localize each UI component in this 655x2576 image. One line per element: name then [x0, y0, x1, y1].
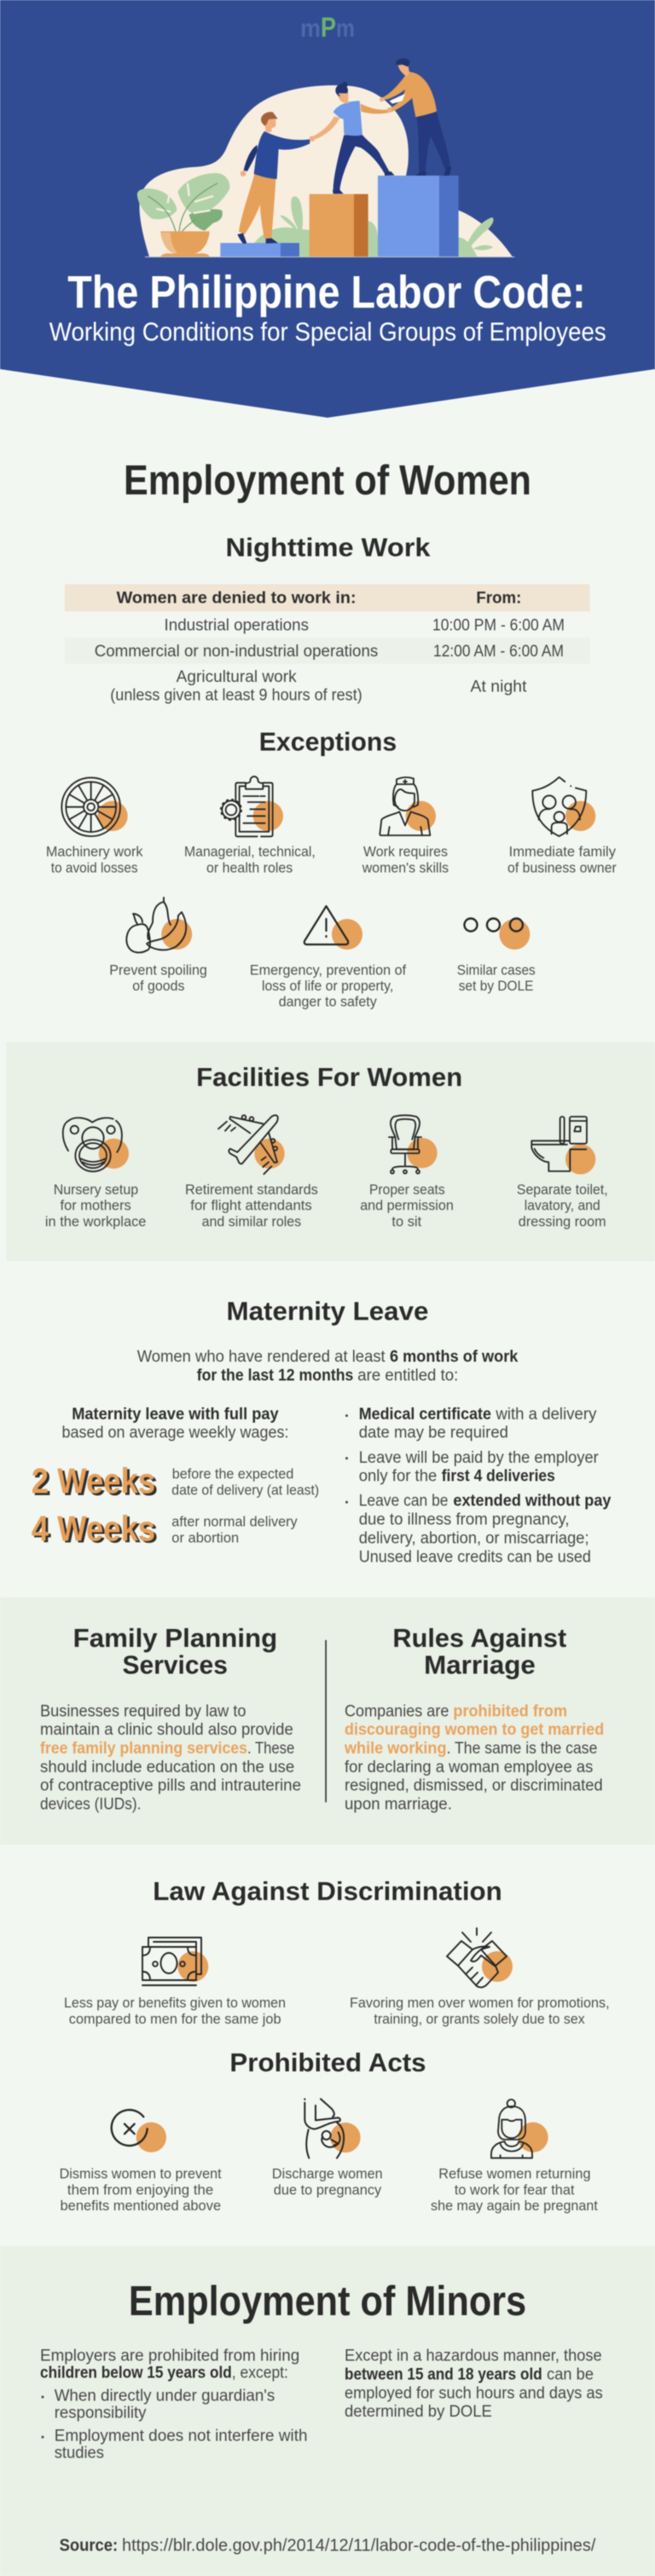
heading: prohibited acts: Prohibited Acts [229, 2048, 426, 2077]
text: maternity intro: are entitled to: [357, 1366, 458, 1384]
heading: exceptions: Exceptions [259, 727, 397, 757]
heading: employment of minors: Employment of Minors [129, 2279, 526, 2325]
caption: seats: and permission [360, 1198, 454, 1214]
list: maternity conditions: first 4 deliveries [442, 1468, 555, 1486]
caption: nursery: in the workplace [45, 1214, 146, 1229]
icon: three dots [464, 919, 530, 950]
text: maternity intro: 6 months of work [390, 1349, 519, 1366]
caption: managerial: Managerial, technical, [184, 845, 316, 860]
caption: toilet [517, 1182, 608, 1229]
caption: seats: to sit [391, 1214, 422, 1229]
caption: machinery [46, 845, 143, 875]
caption: nursery [45, 1182, 146, 1229]
logo: P [321, 12, 336, 43]
caption: machinery: Machinery work [46, 845, 143, 860]
caption: similar cases: set by DOLE [459, 979, 534, 994]
icon: pacifier [63, 1118, 129, 1171]
stat: 2 weeks [32, 1461, 319, 1503]
caption: emergency: Emergency, prevention of [250, 962, 407, 978]
text: rules against marriage: . The same is the case [447, 1740, 597, 1758]
caption: seats [360, 1182, 454, 1229]
text: family planning: of contraceptive pills and intrauterine [40, 1777, 301, 1795]
text: children below 15: Employment does not interfere with [55, 2427, 307, 2445]
icon: fruit [126, 898, 192, 952]
text: family planning: devices (IUDs). [40, 1796, 142, 1814]
caption: immediate family [507, 845, 617, 875]
caption: less pay: Less pay or benefits given to women [64, 1996, 286, 2011]
caption: dismiss: benefits mentioned above [60, 2198, 221, 2214]
stat: 4 weeks: 4 Weeks [32, 1508, 155, 1548]
caption: emergency: loss of life or property, [262, 979, 393, 994]
heading: rules against marriage: Rules Against [392, 1623, 566, 1653]
table: nighttime work hours: Agricultural work [177, 668, 297, 686]
caption: spoiling [109, 962, 207, 994]
caption: favoring men: Favoring men over women for promotions, [350, 1996, 610, 2011]
text: children below 15 [40, 2347, 307, 2462]
icon: woman with bun [491, 2099, 548, 2158]
text: rules against marriage: Companies are [345, 1702, 449, 1720]
text: rules against marriage [344, 1702, 604, 1814]
icon: money [142, 1938, 208, 1985]
text: family planning [40, 1702, 301, 1814]
list: maternity conditions: Leave can be [359, 1493, 449, 1510]
text: maternity intro: for the last 12 months [197, 1366, 353, 1384]
icon: clipboard and gear [221, 777, 283, 836]
caption: refuse: she may again be pregnant [431, 2198, 598, 2214]
caption: dismiss: them from enjoying the [67, 2182, 213, 2198]
caption: immediate family: Immediate family [509, 845, 617, 860]
stat: 4 weeks: after normal delivery [171, 1515, 298, 1530]
text: ages 15 to 18: Except in a hazardous manner, those [345, 2347, 602, 2365]
caption: retirement: and similar roles [202, 1214, 301, 1229]
heading: family planning: Services [123, 1649, 228, 1679]
list: maternity conditions: Unused leave credits can be used [359, 1548, 591, 1566]
list: maternity conditions: date may be required [359, 1424, 508, 1442]
panel: employment of minors [0, 2246, 655, 2576]
text: rules against marriage: discouraging women to get married [345, 1721, 604, 1739]
list: maternity conditions: with a delivery [495, 1406, 597, 1424]
caption: discharge [272, 2167, 383, 2198]
text: children below 15: responsibility [55, 2404, 147, 2422]
list: maternity conditions [345, 1406, 612, 1566]
text: rules against marriage: prohibited from [453, 1702, 567, 1720]
caption: toilet: lavatory, and [525, 1198, 600, 1214]
caption: discharge: due to pregnancy [274, 2182, 382, 2198]
stat: 2 weeks: 2 Weeks [32, 1461, 155, 1501]
table: nighttime work hours: 12:00 AM - 6:00 AM [433, 643, 564, 661]
caption: immediate family: of business owner [507, 860, 617, 875]
caption: managerial [184, 845, 316, 875]
illustration: people climbing steps [137, 59, 514, 257]
heading: rules against marriage: Marriage [424, 1649, 536, 1679]
icon: office chair [389, 1115, 438, 1174]
text: family planning: should include education on the use [40, 1759, 294, 1776]
table: nighttime work hours: From: [476, 590, 521, 608]
logo [300, 12, 355, 43]
heading: family planning: Family Planning [73, 1623, 277, 1653]
list: maternity conditions: Medical certificate [359, 1406, 491, 1424]
caption: retirement: Retirement standards [185, 1182, 318, 1198]
list: maternity conditions: Leave will be paid by the employer [359, 1449, 599, 1467]
icon: handshake [447, 1928, 513, 1987]
caption: less pay [64, 1996, 286, 2027]
table: nighttime work hours: Commercial or non-industrial operations [95, 643, 378, 661]
caption: dismiss: Dismiss women to prevent [60, 2167, 222, 2182]
stat: 4 weeks: 4 Weeks [34, 1510, 158, 1551]
caption: refuse: to work for fear that [455, 2182, 575, 2198]
caption: retirement: for flight attendants [190, 1198, 312, 1214]
logo: m [300, 14, 321, 43]
heading: nighttime work: Nighttime Work [225, 533, 431, 563]
table: nighttime work hours: Industrial operations [164, 616, 309, 634]
icon: airplane [218, 1115, 285, 1174]
text: full pay: based on average weekly wages: [61, 1424, 288, 1442]
text: ages 15 to 18: employed for such hours and days as [345, 2384, 603, 2402]
icon: warning triangle [304, 906, 362, 950]
caption: discharge: Discharge women [272, 2167, 383, 2182]
icon: pregnant belly [304, 2099, 361, 2158]
caption: toilet: Separate toilet, [517, 1182, 608, 1198]
table: nighttime work hours: At night [471, 678, 527, 696]
heading: maternity leave: Maternity Leave [227, 1296, 428, 1326]
heading: employment of women: Employment of Women [124, 458, 531, 504]
text: ages 15 to 18: between 15 and 18 years old [345, 2365, 542, 2383]
text: ages 15 to 18 [345, 2347, 603, 2421]
text: maternity intro: Women who have rendered at least [137, 1349, 385, 1366]
caption: refuse [431, 2167, 598, 2214]
caption: spoiling: Prevent spoiling [109, 962, 207, 978]
caption: women's skills [362, 845, 449, 875]
icon: machinery wheel [61, 777, 128, 836]
text: family planning: . These [247, 1740, 294, 1758]
caption: emergency [250, 962, 407, 1010]
caption: favoring men: training, or grants solely due to sex [374, 2012, 585, 2027]
text: ages 15 to 18: can be [547, 2365, 594, 2383]
text: full pay: Maternity leave with full pay [72, 1406, 279, 1424]
text: rules against marriage: upon marriage. [345, 1796, 452, 1814]
caption: refuse: Refuse women returning [438, 2167, 591, 2182]
text: children below 15: When directly under guardian's [55, 2387, 275, 2405]
text: children below 15: children below 15 years old [40, 2364, 232, 2382]
text: children below 15: Employers are prohibited from hiring [40, 2347, 299, 2365]
caption: retirement [185, 1182, 318, 1229]
text: rules against marriage: while working [344, 1740, 447, 1758]
text: full pay [61, 1406, 288, 1442]
caption: toilet: dressing room [519, 1214, 606, 1229]
text: rules against marriage: for declaring a woman employee as [345, 1759, 593, 1776]
heading: family planning [73, 1623, 277, 1679]
text: maternity intro [137, 1349, 519, 1384]
text: ages 15 to 18: determined by DOLE [345, 2403, 492, 2421]
source: https://blr.dole.gov.ph/2014/12/11/labor-code-of-the-philippines/ [122, 2537, 596, 2556]
stat: 2 weeks: 2 Weeks [34, 1463, 158, 1503]
heading: facilities: Facilities For Women [196, 1062, 462, 1092]
text: children below 15: , except: [232, 2364, 288, 2382]
caption: similar cases [457, 962, 536, 994]
title: The Philippine Labor Code: [67, 267, 586, 318]
stat: 2 weeks: before the expected [172, 1466, 293, 1481]
caption: favoring men [350, 1996, 610, 2027]
text: family planning: maintain a clinic should also provide [40, 1721, 293, 1739]
text: rules against marriage: resigned, dismissed, or discriminated [345, 1777, 603, 1795]
caption: women's skills: Work requires [363, 845, 448, 860]
table: nighttime work hours: Women are denied to work in: [117, 590, 356, 608]
text: family planning: Businesses required by law to [40, 1702, 246, 1720]
subtitle: Working Conditions for Special Groups of Employees [49, 316, 606, 346]
stat: 2 weeks: date of delivery (at least) [171, 1482, 319, 1498]
panel: family planning and marriage [0, 1597, 655, 1845]
caption: spoiling: of goods [132, 979, 184, 994]
list: maternity conditions: only for the [359, 1468, 437, 1486]
source: Source: [60, 2537, 118, 2556]
heading: law against discrimination: Law Against Discrimination [153, 1876, 502, 1906]
hero banner [0, 0, 655, 418]
text: children below 15: studies [55, 2444, 104, 2462]
stat: 4 weeks [32, 1508, 298, 1551]
caption: women's skills: women's skills [362, 860, 449, 875]
caption: similar cases: Similar cases [457, 962, 536, 978]
text: family planning: free family planning services [40, 1740, 247, 1758]
heading: rules against marriage [392, 1623, 566, 1679]
table: nighttime work hours: 10:00 PM - 6:00 AM [432, 616, 565, 634]
list: maternity conditions: delivery, abortion, or miscarriage; [359, 1529, 589, 1547]
table: nighttime work hours: (unless given at least 9 hours of rest) [110, 687, 362, 705]
caption: nursery: for mothers [60, 1198, 131, 1214]
caption: machinery: to avoid losses [51, 860, 138, 875]
icon: dismiss x [112, 2110, 166, 2152]
list: maternity conditions: due to illness from pregnancy, [359, 1510, 570, 1528]
icon: toilet [531, 1117, 595, 1175]
icon: nurse [380, 777, 436, 835]
caption: emergency: danger to safety [279, 995, 378, 1010]
caption: seats: Proper seats [369, 1182, 445, 1198]
icon: family in shield [532, 777, 595, 836]
caption: managerial: or health roles [206, 860, 293, 875]
caption: less pay: compared to men for the same job [69, 2012, 281, 2027]
table: nighttime work hours [65, 584, 590, 705]
caption: dismiss [60, 2167, 222, 2214]
panel: facilities for women [6, 1043, 655, 1261]
caption: nursery: Nursery setup [54, 1182, 138, 1198]
logo: m [336, 14, 355, 43]
stat: 4 weeks: or abortion [171, 1530, 239, 1545]
list: maternity conditions: extended without pay [453, 1493, 612, 1510]
